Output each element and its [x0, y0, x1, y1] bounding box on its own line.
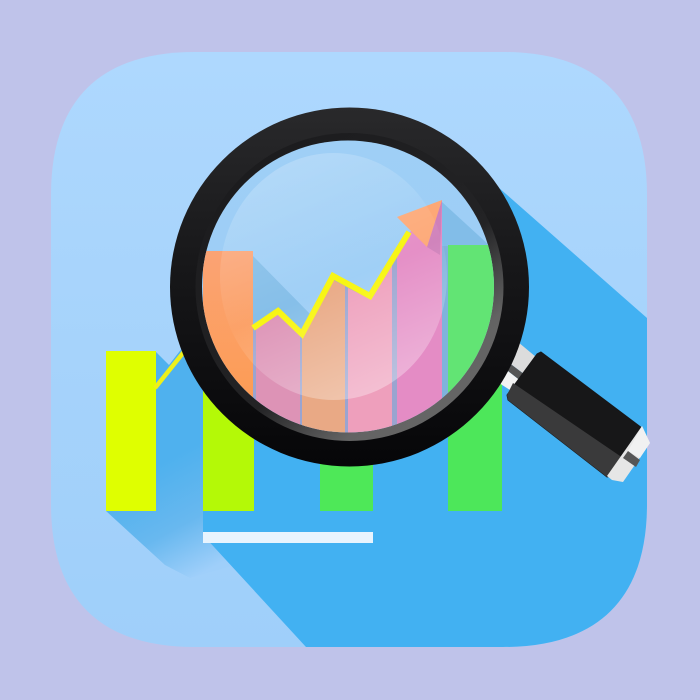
collar light top	[508, 342, 536, 374]
lens glass highlight	[220, 153, 447, 400]
infographic: app icon with magnifier over bar chart	[51, 52, 650, 647]
lens bar pink 2	[348, 263, 392, 440]
trend arrow head	[397, 200, 442, 247]
lens bar green	[448, 245, 494, 393]
lens chart shadow 2	[442, 202, 490, 246]
axis line	[203, 532, 373, 543]
bar 2	[203, 380, 254, 511]
handle grip	[507, 352, 643, 477]
lens	[200, 138, 500, 441]
lens chart shadow	[253, 256, 312, 333]
collar highlight	[499, 368, 520, 392]
magnifier handle	[499, 342, 650, 482]
lens bar gap strip	[253, 250, 398, 440]
shadow: fading shadow of first bar	[106, 349, 222, 575]
lens background	[200, 138, 500, 438]
arrow shadow on bar	[427, 200, 442, 255]
end cap highlight	[628, 426, 650, 458]
lens bar orange	[203, 251, 253, 398]
bar chart	[106, 351, 502, 511]
collar band	[504, 362, 524, 381]
handle grip lighter stripe	[507, 383, 623, 477]
lens trend line	[253, 232, 409, 334]
lens bar orchid	[397, 200, 442, 440]
magnifier ring	[170, 108, 529, 466]
ring inner bevel	[196, 133, 504, 441]
trend line outside lens	[155, 348, 187, 388]
gap right strip	[442, 246, 449, 398]
bar 1	[106, 351, 156, 511]
lens bar peach	[302, 280, 345, 440]
long shadow	[106, 187, 647, 647]
end cap band	[623, 451, 640, 467]
lens bar pink 1	[256, 315, 300, 424]
shadow: main long shadow	[203, 187, 647, 647]
panel: rounded app tile	[51, 52, 647, 647]
bar 3	[320, 420, 373, 511]
bar 4	[448, 380, 502, 511]
end cap	[607, 426, 650, 482]
